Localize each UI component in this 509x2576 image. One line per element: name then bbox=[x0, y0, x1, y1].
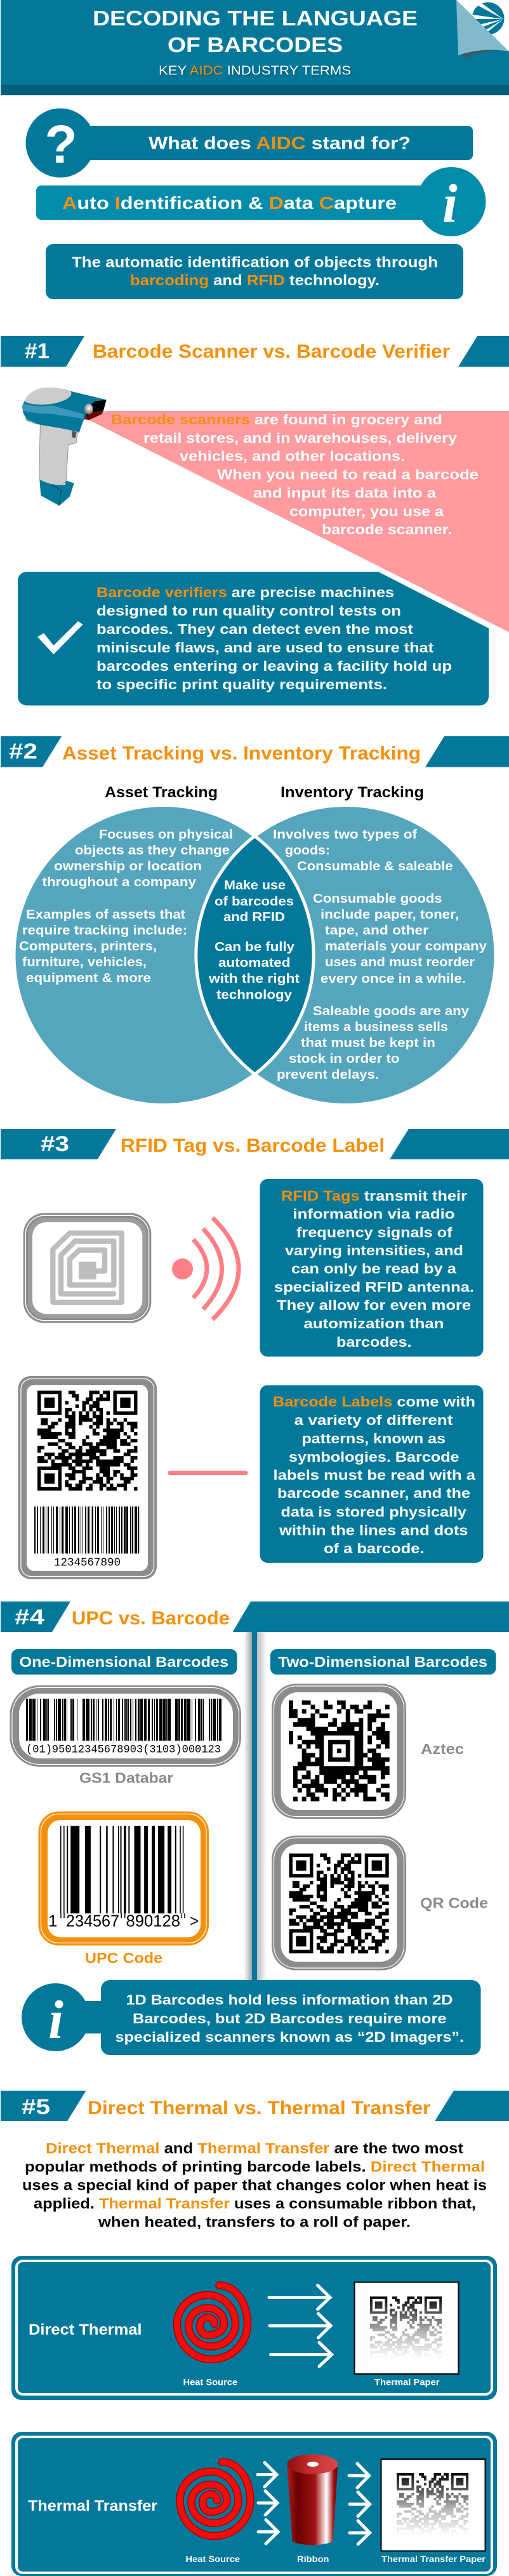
icon: barcode label bbox=[18, 1376, 157, 1579]
thermal intro paragraph: applied. Thermal Transfer uses a consumable ribbon that, bbox=[34, 2195, 476, 2212]
venn centre text: Can be fully bbox=[215, 940, 295, 954]
thermal paper bbox=[354, 2282, 458, 2374]
barcode labels text: data is stored physically bbox=[281, 1504, 467, 1520]
barcode labels text: patterns, known as bbox=[302, 1431, 446, 1446]
venn centre text bbox=[208, 879, 300, 1002]
verifier text: barcodes. They can detect even the most bbox=[96, 621, 414, 637]
thermal intro paragraph: when heated, transfers to a roll of paper. bbox=[98, 2213, 411, 2230]
venn centre text: automated bbox=[218, 956, 291, 970]
definition text: The automatic identification of objects through bbox=[72, 254, 438, 271]
scanner text: and input its data into a bbox=[253, 485, 437, 501]
scanner text bbox=[111, 412, 479, 537]
barcode labels text: within the lines and dots bbox=[279, 1522, 468, 1539]
title: OF BARCODES bbox=[168, 33, 343, 57]
verifier text: barcodes entering or leaving a facility hold up bbox=[96, 658, 452, 674]
section 3 banner: #3 bbox=[41, 1132, 69, 1156]
pill: two-dimensional: Two-Dimensional Barcodes bbox=[278, 1654, 487, 1670]
barcode labels text: barcode scanner, and the bbox=[277, 1485, 470, 1501]
icon: radio signal bbox=[172, 1218, 239, 1319]
icon: info i: i bbox=[442, 173, 458, 234]
callout text bbox=[116, 1992, 464, 2045]
RFID tags text: information via radio bbox=[293, 1206, 454, 1222]
RFID tags text: can only be read by a bbox=[291, 1260, 457, 1277]
scanner beam bbox=[84, 411, 509, 632]
RFID tags text: varying intensities, and bbox=[285, 1243, 463, 1258]
panel: direct thermal bbox=[11, 2256, 497, 2400]
verifier text: designed to run quality control tests on bbox=[96, 603, 401, 619]
RFID tags panel bbox=[260, 1179, 484, 1357]
caption: heat source: Heat Source bbox=[183, 2377, 237, 2387]
UPC code barcode: 1 bbox=[48, 1911, 57, 1930]
answer text: Auto Identification & Data Capture bbox=[62, 193, 397, 213]
venn right text: include paper, toner, bbox=[321, 908, 459, 922]
icon: barcode label: 1234567890 bbox=[54, 1556, 121, 1569]
label: Aztec: Aztec bbox=[421, 1741, 464, 1757]
icon: question mark: ? bbox=[44, 114, 77, 174]
title: DECODING THE LANGUAGE bbox=[93, 6, 418, 30]
verifier text: to specific print quality requirements. bbox=[96, 677, 387, 692]
thermal intro paragraph: uses a special kind of paper that changes color when heat is bbox=[22, 2176, 487, 2193]
verifier text: Barcode verifiers are precise machines bbox=[96, 584, 394, 600]
column divider bbox=[244, 1632, 267, 1980]
verifier text bbox=[96, 584, 452, 692]
caption: thermal paper: Thermal Paper bbox=[374, 2377, 440, 2387]
panel: thermal transfer bbox=[11, 2432, 497, 2576]
icon: ribbon roll bbox=[287, 2455, 338, 2545]
barcode labels text: Barcode Labels come with bbox=[273, 1394, 475, 1410]
icon: RFID tag bbox=[23, 1213, 151, 1323]
verifier text: miniscule flaws, and are used to ensure that bbox=[96, 640, 434, 656]
venn right text: every once in a while. bbox=[321, 972, 466, 986]
venn right text: prevent delays. bbox=[277, 1068, 379, 1082]
RFID tags text: automization than bbox=[303, 1316, 444, 1332]
RFID tags text bbox=[274, 1188, 474, 1350]
definition text: barcoding and RFID technology. bbox=[130, 272, 380, 288]
venn right text: materials your company bbox=[325, 940, 487, 954]
icon: heat coil bbox=[180, 2462, 250, 2536]
pill: one-dimensional bbox=[11, 1649, 237, 1675]
venn right text: goods: bbox=[285, 844, 330, 858]
definition box bbox=[46, 244, 463, 299]
barcode labels text: of a barcode. bbox=[324, 1541, 424, 1556]
UPC code barcode: > bbox=[190, 1911, 199, 1930]
arrows: ribbon to paper bbox=[349, 2464, 369, 2544]
section 2 banner: #2 bbox=[9, 739, 37, 764]
barcode labels text: a variety of different bbox=[294, 1412, 453, 1428]
UPC code barcode: 890128 bbox=[126, 1911, 180, 1930]
venn left text: require tracking include: bbox=[22, 924, 187, 938]
answer bar bbox=[36, 167, 486, 236]
barcode labels text bbox=[273, 1394, 476, 1556]
venn right text: Consumable & saleable bbox=[297, 860, 453, 873]
section 5 banner: #5 bbox=[22, 2095, 50, 2119]
section 4 banner: #4 bbox=[15, 1605, 44, 1629]
venn right text: tape, and other bbox=[325, 924, 428, 938]
venn left text: Focuses on physical bbox=[99, 828, 233, 842]
UPC code barcode: 234567 bbox=[66, 1911, 119, 1930]
venn headings: Asset Tracking bbox=[105, 784, 218, 801]
verifier panel bbox=[18, 572, 489, 705]
icon: heat coil bbox=[177, 2285, 248, 2359]
section 3 banner: RFID Tag vs. Barcode Label bbox=[121, 1135, 385, 1156]
scanner text: vehicles, and other locations. bbox=[180, 448, 405, 464]
QR code bbox=[272, 1836, 406, 1971]
icon: info i: i bbox=[48, 1989, 63, 2050]
header banner bbox=[1, 0, 509, 95]
venn left text: equipment & more bbox=[26, 971, 151, 985]
caption: heat source: Heat Source bbox=[185, 2554, 240, 2564]
label: GS1 Databar: GS1 Databar bbox=[79, 1770, 173, 1786]
caption: ribbon: Ribbon bbox=[297, 2554, 329, 2564]
RFID tags text: barcodes. bbox=[336, 1334, 411, 1350]
Aztec barcode bbox=[272, 1683, 406, 1819]
venn right text: items a business sells bbox=[304, 1020, 448, 1034]
RFID tags text: frequency signals of bbox=[296, 1225, 453, 1240]
venn left text: furniture, vehicles, bbox=[22, 955, 147, 969]
scanner text: barcode scanner. bbox=[322, 522, 452, 537]
venn right text bbox=[273, 828, 487, 1082]
venn right text: Saleable goods are any bbox=[313, 1004, 470, 1018]
GS1 databar barcode bbox=[10, 1685, 241, 1767]
venn centre text: Make use bbox=[224, 879, 286, 893]
title bbox=[93, 6, 418, 57]
definition text bbox=[72, 254, 438, 288]
icon: check mark bbox=[37, 621, 83, 654]
UPC code barcode bbox=[38, 1812, 209, 1945]
venn right text: that must be kept in bbox=[301, 1036, 435, 1050]
label: UPC Code: UPC Code bbox=[85, 1950, 162, 1966]
arrows bbox=[269, 2286, 331, 2366]
panel title: Direct Thermal bbox=[29, 2321, 142, 2338]
GS1 databar barcode: (01)95012345678903(3103)000123 bbox=[26, 1743, 221, 1756]
section 4 banner: UPC vs. Barcode bbox=[72, 1608, 230, 1629]
venn centre text: with the right bbox=[208, 972, 300, 986]
info callout bbox=[22, 1980, 481, 2055]
venn headings: Inventory Tracking bbox=[281, 784, 424, 801]
venn left text bbox=[19, 828, 233, 985]
venn left text: Examples of assets that bbox=[26, 908, 185, 922]
scanner text: Barcode scanners are found in grocery and bbox=[111, 412, 442, 428]
venn right text: Consumable goods bbox=[313, 892, 442, 906]
section 2 banner: Asset Tracking vs. Inventory Tracking bbox=[62, 743, 421, 764]
scanner text: retail stores, and in warehouses, delivery bbox=[143, 430, 458, 446]
arrows: coil to ribbon bbox=[258, 2462, 278, 2544]
venn headings bbox=[105, 784, 424, 801]
venn centre text: of barcodes bbox=[215, 894, 294, 908]
venn right text: uses and must reorder bbox=[325, 955, 475, 969]
question bar bbox=[25, 108, 473, 178]
callout text: specialized scanners known as “2D Imagers”. bbox=[116, 2029, 464, 2045]
venn right text: Involves two types of bbox=[273, 828, 417, 842]
venn centre text: technology bbox=[216, 988, 293, 1002]
venn left text: objects as they change bbox=[75, 844, 230, 858]
caption: transfer paper: Thermal Transfer Paper bbox=[381, 2554, 486, 2564]
section 5 banner: Direct Thermal vs. Thermal Transfer bbox=[88, 2098, 431, 2119]
barcode labels text: symbologies. Barcode bbox=[289, 1449, 459, 1465]
RFID tags text: They allow for even more bbox=[277, 1297, 471, 1313]
RFID tags text: RFID Tags transmit their bbox=[281, 1188, 467, 1204]
question text: What does AIDC stand for? bbox=[149, 133, 411, 152]
icon: barcode scanner bbox=[22, 388, 107, 506]
transfer paper bbox=[381, 2459, 485, 2551]
subtitle: KEY AIDC INDUSTRY TERMS bbox=[159, 64, 351, 78]
venn left text: throughout a company bbox=[42, 875, 197, 889]
section 4 banner bbox=[1, 1602, 509, 1632]
section 1 banner: Barcode Scanner vs. Barcode Verifier bbox=[93, 341, 450, 362]
section 1 banner: #1 bbox=[25, 339, 50, 363]
icon: page curl with logo bbox=[456, 0, 509, 58]
venn right text: stock in order to bbox=[289, 1052, 400, 1066]
thermal intro paragraph: popular methods of printing barcode labels. Direct Thermal bbox=[25, 2159, 485, 2175]
barcode labels panel bbox=[260, 1385, 484, 1563]
callout text: Barcodes, but 2D Barcodes require more bbox=[133, 2011, 447, 2026]
pill: two-dimensional bbox=[270, 1649, 496, 1675]
connector line bbox=[170, 1471, 246, 1475]
thermal intro paragraph bbox=[22, 2140, 487, 2230]
section 2 banner bbox=[1, 736, 509, 767]
section 3 banner bbox=[1, 1129, 509, 1159]
section 1 banner bbox=[1, 336, 509, 367]
venn left text: ownership or location bbox=[54, 860, 202, 873]
RFID tags text: specialized RFID antenna. bbox=[274, 1279, 474, 1295]
scanner text: When you need to read a barcode bbox=[217, 466, 479, 483]
venn centre text: and RFID bbox=[223, 910, 285, 924]
pill: one-dimensional: One-Dimensional Barcodes bbox=[19, 1654, 228, 1670]
panel title: Thermal Transfer bbox=[28, 2498, 157, 2514]
venn diagram bbox=[14, 806, 496, 1105]
label: QR Code: QR Code bbox=[420, 1894, 488, 1911]
barcode labels text: labels must be read with a bbox=[273, 1467, 476, 1483]
callout text: 1D Barcodes hold less information than 2D bbox=[126, 1992, 453, 2007]
thermal intro paragraph: Direct Thermal and Thermal Transfer are the two most bbox=[46, 2140, 463, 2156]
scanner text: computer, you use a bbox=[289, 503, 444, 520]
venn left text: Computers, printers, bbox=[19, 940, 157, 954]
section 5 banner bbox=[1, 2091, 509, 2121]
